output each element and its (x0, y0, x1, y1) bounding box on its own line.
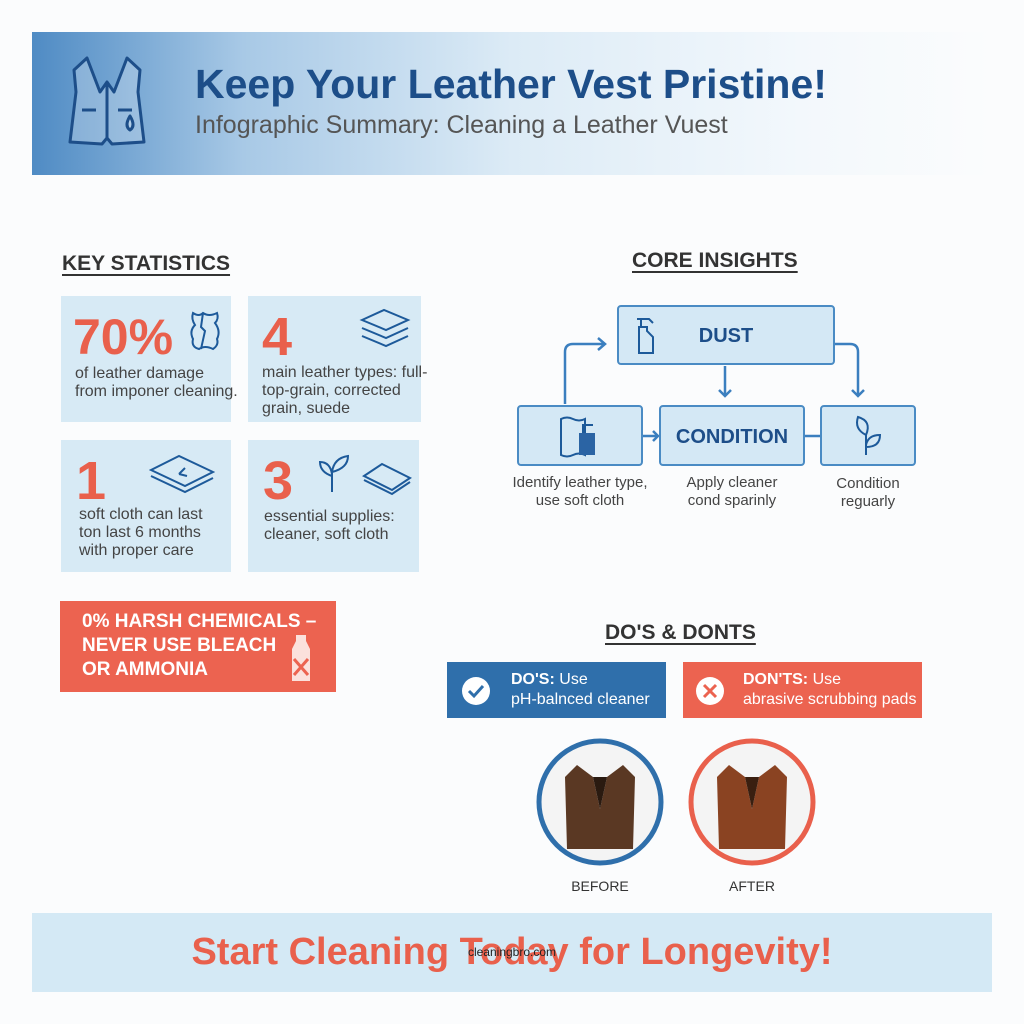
stat card 3: cleaner, soft cloth (264, 526, 389, 543)
arrows (564, 337, 865, 442)
header banner (32, 32, 992, 175)
stat card 4: 4 (262, 307, 292, 367)
labels (512, 474, 648, 509)
callout: no harsh chemicals: 0% HARSH CHEMICALS – (82, 611, 316, 632)
stat card 70%: of leather damage (75, 365, 204, 382)
flowchart: Condition (836, 475, 900, 492)
callout: no harsh chemicals: NEVER USE BLEACH (82, 635, 276, 656)
heading: dos and donts: DO'S & DONTS (605, 621, 756, 644)
dont box: abrasive scrubbing pads (743, 691, 916, 708)
stat card 1 (61, 440, 231, 572)
footer banner: Start Cleaning Today for Longevity! (191, 931, 833, 973)
dont box: DON'TS: Use (743, 671, 841, 688)
stat card 4: main leather types: full- (262, 364, 427, 381)
box: leaf (820, 405, 916, 466)
callout: no harsh chemicals (60, 601, 336, 692)
stat card 1: with proper care (79, 542, 194, 559)
stat card 4: top-grain, corrected (262, 382, 401, 399)
after image: AFTER (729, 878, 775, 894)
do box: pH-balnced cleaner (511, 691, 650, 708)
flowchart: Apply cleaner (687, 474, 777, 491)
flowchart: cond sparinly (688, 492, 776, 509)
stat card 70%: 70% (73, 309, 173, 365)
title: Keep Your Leather Vest Pristine! (195, 61, 827, 107)
do box: DO'S: Use (511, 671, 588, 688)
do box (447, 662, 666, 718)
before image (536, 738, 664, 894)
footer banner (32, 913, 992, 992)
flowchart (512, 305, 916, 510)
stat card 70% (61, 296, 231, 422)
footer banner: cleaningbro.com (468, 945, 556, 959)
box: dust (617, 305, 835, 365)
labels: use soft cloth (536, 492, 624, 509)
icon: vest (68, 56, 146, 146)
stat card 70%: from imponer cleaning. (75, 383, 238, 400)
box: condition: CONDITION (676, 426, 788, 448)
stat card 1: ton last 6 months (79, 524, 201, 541)
box: dust: DUST (699, 325, 753, 347)
after image (688, 738, 816, 894)
box: condition (659, 405, 805, 466)
stat card 3: essential supplies: (264, 508, 395, 525)
flowchart: reguarly (841, 493, 895, 510)
before image: BEFORE (571, 878, 629, 894)
stat card 4 (248, 296, 421, 422)
stat card 3: 3 (263, 451, 293, 511)
box: identify (517, 405, 643, 466)
subtitle: Infographic Summary: Cleaning a Leather Vuest (195, 111, 728, 139)
heading: key statistics: KEY STATISTICS (62, 252, 230, 275)
dont box (683, 662, 922, 718)
stat card 1: 1 (76, 451, 106, 511)
stat card 3 (248, 440, 419, 572)
heading: core insights: CORE INSIGHTS (632, 249, 798, 272)
labels: Identify leather type, (512, 474, 648, 491)
callout: no harsh chemicals: OR AMMONIA (82, 659, 208, 680)
stat card 4: grain, suede (262, 400, 350, 417)
stat card 1: soft cloth can last (79, 506, 203, 523)
